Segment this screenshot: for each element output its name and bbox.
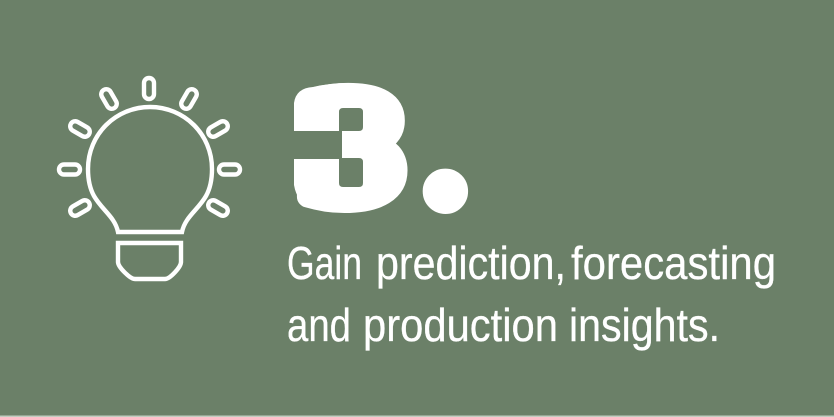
heading: step number: 3: [298, 68, 408, 234]
text block: description: production: [363, 299, 558, 351]
text block: description: forecasting: [571, 237, 776, 289]
text block: description: [287, 237, 776, 351]
icon: light bulb: [59, 78, 240, 279]
bulb socket: [118, 243, 181, 279]
text block: description: Gain: [287, 237, 362, 289]
bulb outline: [88, 107, 212, 232]
text block: description: and: [287, 299, 351, 351]
heading: step number: [292, 0, 480, 271]
text block: description: insights.: [569, 299, 720, 351]
light rays: [59, 78, 240, 218]
text block: description: prediction,: [376, 237, 566, 289]
